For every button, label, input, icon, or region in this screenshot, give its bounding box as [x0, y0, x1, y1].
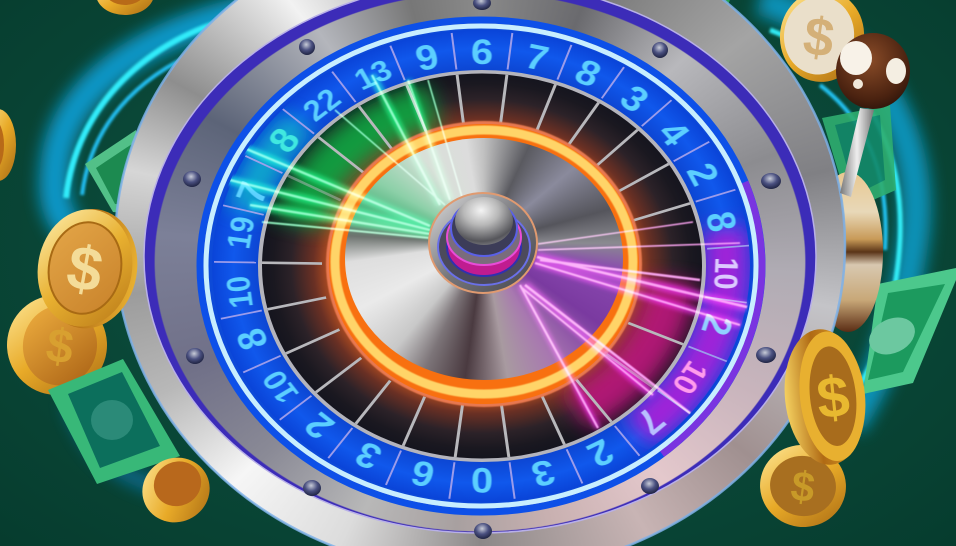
- swirl: left cyan glow: [54, 10, 250, 490]
- wheel numbers: [219, 32, 746, 500]
- wheel numbers: 8: [259, 121, 309, 159]
- wheel numbers: 6: [407, 453, 439, 495]
- pocket ring: [260, 72, 704, 460]
- green light rays: [222, 75, 462, 238]
- outer blue neon ring: [200, 20, 762, 512]
- pink and violet light rays: [520, 222, 747, 428]
- banknote: left lower: [48, 359, 180, 484]
- wheel numbers: 8: [568, 51, 608, 95]
- wheel numbers: 8: [697, 208, 746, 235]
- wheel numbers: 3: [527, 452, 560, 495]
- wheel numbers: 3: [612, 77, 657, 120]
- coin: large right: $: [814, 364, 853, 432]
- wheel numbers: 8: [227, 323, 277, 355]
- wheel numbers: 2: [678, 157, 728, 191]
- purple tint on outer neon ring: [662, 182, 762, 454]
- pocket light tints: [298, 105, 671, 410]
- wheel numbers: 2: [693, 310, 742, 340]
- wheel numbers: 19: [220, 214, 262, 251]
- wheel numbers: 7: [521, 36, 553, 79]
- wheel numbers: 7: [227, 177, 277, 209]
- neon orange ring: [326, 121, 642, 407]
- coin: top right: $: [800, 6, 838, 69]
- swirl: right cyan glow: [760, 0, 916, 425]
- wheel numbers: 9: [411, 36, 443, 79]
- wheel numbers: 4: [650, 113, 699, 153]
- hub dome: [455, 197, 513, 245]
- tints on number track: [245, 122, 727, 430]
- wheel numbers: 10: [219, 274, 260, 310]
- wheel numbers: 10: [255, 364, 306, 409]
- steel plate: [154, 0, 806, 532]
- coin: large left: [28, 201, 147, 336]
- coin: top edge: [96, 0, 154, 15]
- wheel numbers: 2: [580, 432, 621, 475]
- banknote: right upper: [822, 105, 896, 210]
- number ring, pockets and labels: [196, 16, 766, 516]
- wheel numbers: 10: [665, 355, 716, 400]
- banknote: left upper: [85, 130, 150, 215]
- separators: [214, 33, 749, 499]
- wheel numbers: 2: [296, 405, 342, 447]
- coin: bottom right: [755, 439, 851, 533]
- coin: left lower behind: [1, 289, 113, 401]
- wheel numbers: 22: [296, 82, 348, 128]
- wheel numbers: 10: [707, 257, 745, 290]
- coin: left edge: [0, 109, 16, 181]
- metal drum behind right rim: [813, 172, 883, 332]
- squashed wheel group: [212, 30, 752, 502]
- wheel numbers: 0: [471, 461, 493, 500]
- wheel numbers: 7: [627, 401, 674, 442]
- brushed metal cone disk: [345, 138, 623, 380]
- wheel numbers: 6: [471, 32, 493, 71]
- bolts on plate: [183, 0, 781, 539]
- hub stem with magenta band: [447, 218, 521, 276]
- center hub: [429, 193, 537, 293]
- banknote: top right sliver: [702, 0, 731, 14]
- hub base: [429, 193, 537, 293]
- coin: left lower behind: $: [43, 319, 77, 375]
- wheel outer rim: [116, 0, 846, 546]
- white neon ring: [206, 26, 756, 506]
- coin: bottom left: [132, 447, 220, 533]
- wheel numbers: 3: [348, 434, 388, 478]
- coin: top right: [774, 0, 870, 87]
- number track: [212, 30, 752, 502]
- coin: large right: [778, 325, 872, 469]
- coin: large left: $: [62, 233, 108, 306]
- coin: bottom right: $: [788, 462, 818, 511]
- banknote: right lower: [863, 268, 956, 394]
- lever: [836, 33, 910, 197]
- wheel numbers: 13: [348, 53, 398, 97]
